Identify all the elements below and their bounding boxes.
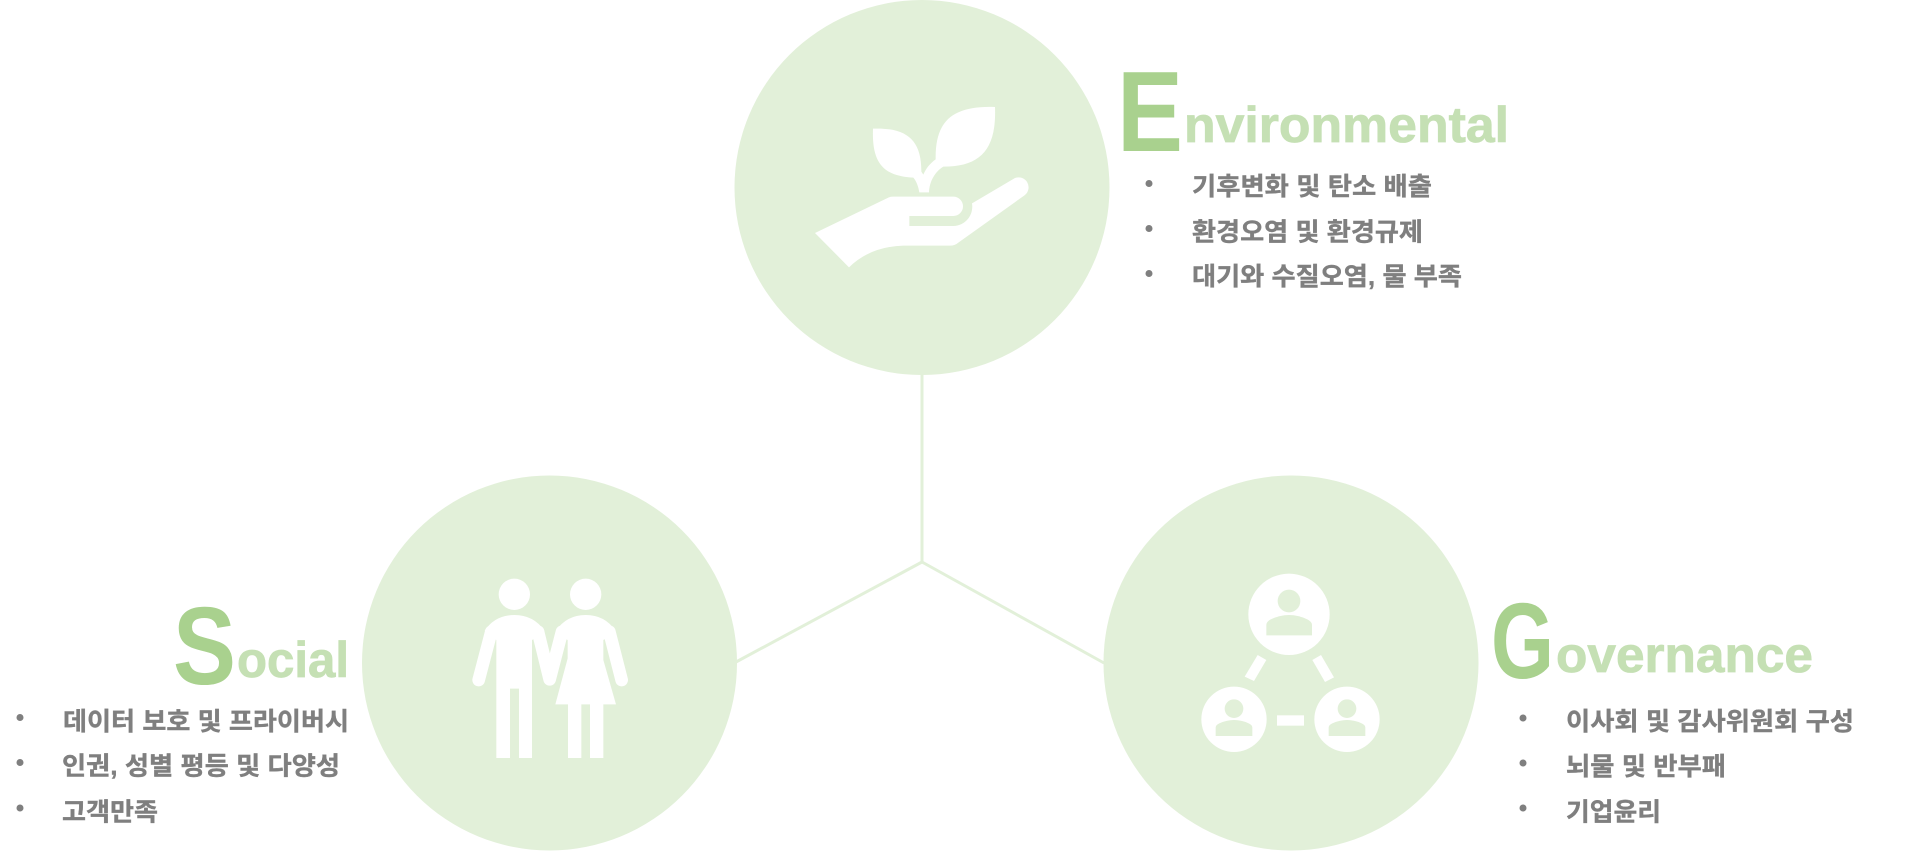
list: social items (16, 708, 349, 826)
list: environmental items: 기후변화 및 탄소 배출 (1192, 173, 1432, 201)
panel: social circle (362, 476, 737, 850)
list: social items: 고객만족 (62, 798, 158, 826)
heading: Social (173, 585, 349, 708)
list: governance items: 기업윤리 (1566, 798, 1661, 826)
heading: Environmental (1117, 49, 1509, 176)
list: governance items: 뇌물 및 반부패 (1566, 753, 1726, 781)
list: environmental items: 환경오염 및 환경규제 (1192, 218, 1423, 246)
panel: environmental circle (734, 0, 1110, 375)
heading: Governance (1491, 580, 1813, 701)
heading: Social: ocial (237, 632, 349, 688)
icon: three connected people (1201, 574, 1380, 752)
list: environmental items: 대기와 수질오염, 물 부족 (1192, 263, 1462, 291)
icon: two people holding hands (479, 579, 622, 758)
heading: Environmental: E (1117, 49, 1183, 176)
list: social items: 데이터 보호 및 프라이버시 (63, 708, 349, 736)
heading: Social: S (173, 585, 236, 708)
heading: Governance: overnance (1556, 627, 1813, 683)
icon: hand holding sprout (815, 107, 1029, 267)
list: governance items: 이사회 및 감사위원회 구성 (1566, 708, 1854, 736)
list: governance items (1520, 708, 1854, 826)
heading: Governance: G (1491, 580, 1554, 701)
connector lines (736, 375, 1104, 663)
list: environmental items (1146, 173, 1462, 291)
heading: Environmental: nvironmental (1184, 97, 1509, 153)
panel: governance circle (1104, 476, 1478, 850)
list: social items: 인권, 성별 평등 및 다양성 (62, 752, 340, 780)
